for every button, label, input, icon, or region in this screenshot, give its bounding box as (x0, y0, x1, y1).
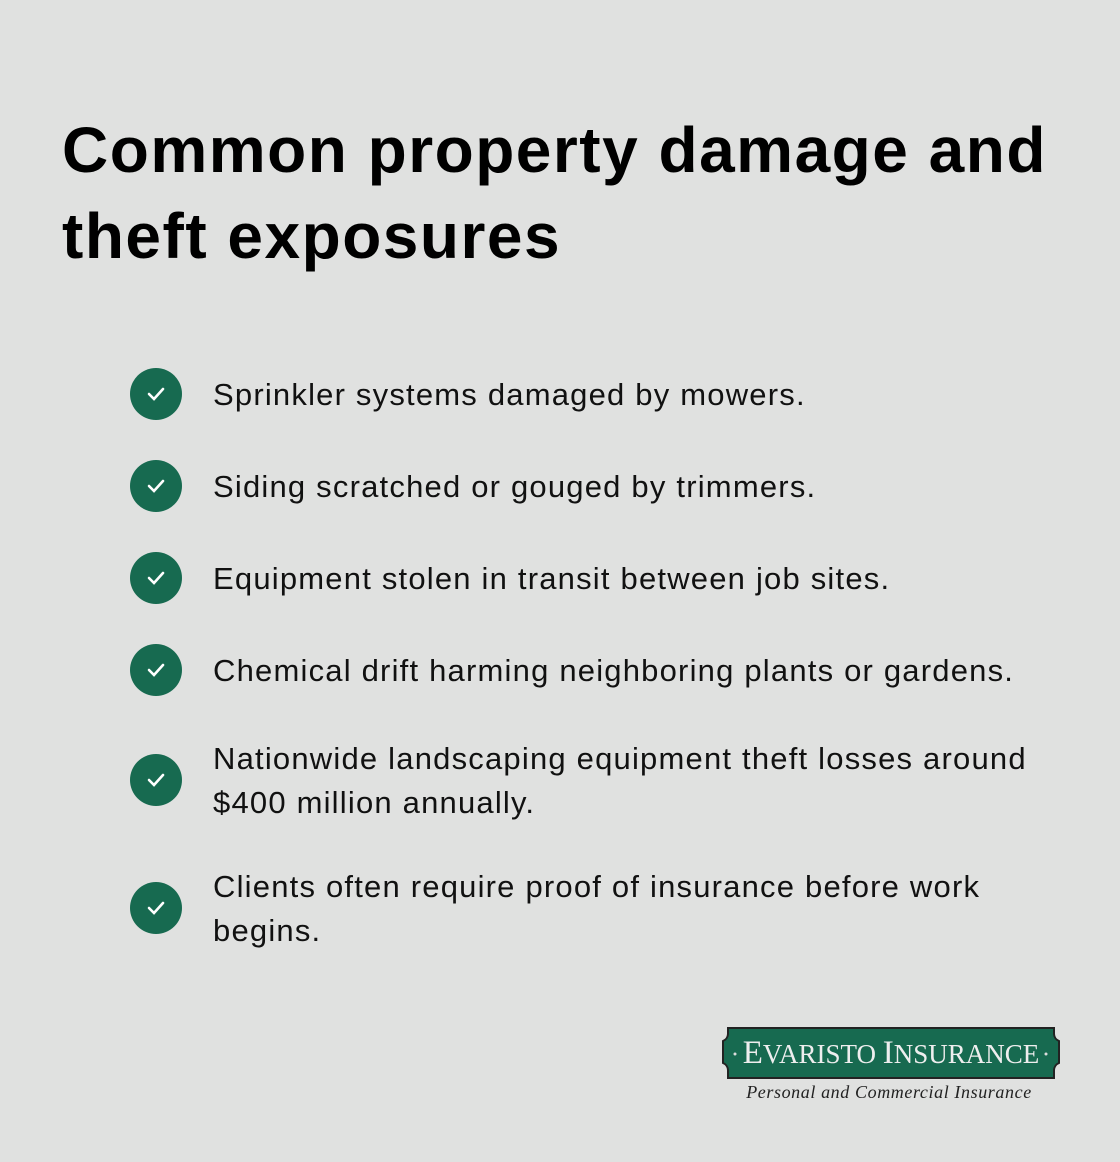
item 5: $400 million annually. (213, 785, 535, 820)
item 6: begins. (213, 913, 321, 948)
item 1: Sprinkler systems damaged by mowers. (213, 377, 806, 412)
title: Common property damage and (62, 114, 1047, 186)
logo (722, 1027, 1060, 1102)
item 1 (130, 368, 806, 420)
item 4: Chemical drift harming neighboring plants or gardens. (213, 653, 1014, 688)
item 3 (130, 552, 890, 604)
logo: EVARISTO INSURANCE (743, 1035, 1039, 1071)
item 3: Equipment stolen in transit between job sites. (213, 561, 890, 596)
logo: Personal and Commercial Insurance (745, 1082, 1032, 1102)
item 2 (130, 460, 816, 512)
item 5: Nationwide landscaping equipment theft losses around (213, 741, 1027, 776)
item 4 (130, 644, 1014, 696)
item 6: Clients often require proof of insurance before work (213, 869, 980, 904)
item 5 (130, 741, 1027, 820)
item 2: Siding scratched or gouged by trimmers. (213, 469, 816, 504)
title (62, 114, 1047, 272)
title: theft exposures (62, 200, 561, 272)
item 6 (130, 869, 980, 948)
